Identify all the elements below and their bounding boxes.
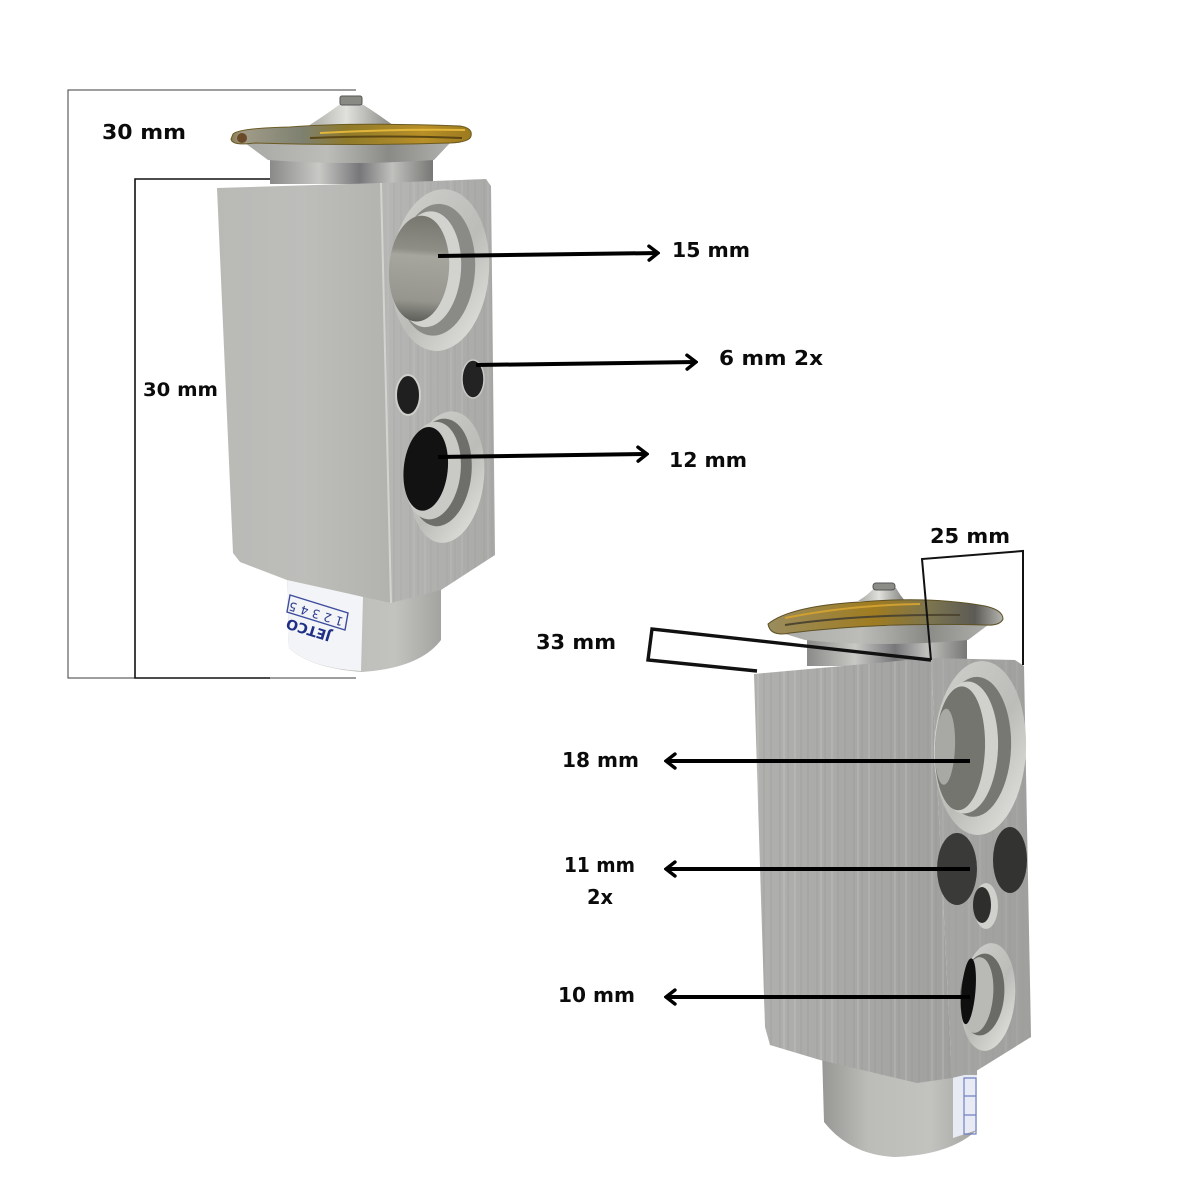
valve 1 lower port <box>396 407 491 547</box>
valve 1 lower cylinder: 1 2 3 4 5 <box>287 599 345 629</box>
valve 2 left medium hole <box>937 833 977 905</box>
valve 1 gold rim <box>231 124 471 144</box>
arrow: 18 mm <box>666 759 970 763</box>
valve 2 large port <box>931 659 1029 837</box>
arrow: 12 mm <box>438 454 647 457</box>
valve 1 screw <box>340 96 362 105</box>
label: 6 mm 2x: 6 mm 2x <box>719 346 823 370</box>
label: 11 mm 2x: 11 mm <box>564 853 635 877</box>
valve 1 bowl <box>245 143 450 163</box>
valve 1 neck <box>270 158 433 184</box>
valve photo: top left <box>217 96 495 672</box>
label: 15 mm: 15 mm <box>672 238 750 262</box>
label: 10 mm: 10 mm <box>558 983 635 1007</box>
label: 18 mm: 18 mm <box>562 748 639 772</box>
dimension bracket: 33 mm <box>648 629 931 671</box>
dimension bracket: body height <box>135 179 270 678</box>
valve 1 small hole right <box>462 360 484 398</box>
valve 2 lower port <box>955 941 1020 1053</box>
valve 2 small threaded hole <box>973 883 998 929</box>
valve 1 body left face <box>217 183 391 603</box>
valve 1 lower cylinder: JETCO <box>284 615 334 644</box>
label: 11 mm 2x: 2x <box>587 885 613 909</box>
valve 1 small hole left <box>396 375 420 415</box>
arrow: 15 mm <box>438 253 658 256</box>
arrow: 6 mm <box>476 362 696 365</box>
valve 2 gold rim <box>768 600 1003 634</box>
valve photo: bottom right <box>754 583 1031 1157</box>
label: 12 mm: 12 mm <box>669 448 747 472</box>
dimension bracket: 25 mm <box>922 551 1023 665</box>
arrow: 10 mm <box>666 995 970 999</box>
label: 33 mm: 33 mm <box>536 630 616 654</box>
label: 30 mm overall: 30 mm <box>102 120 186 144</box>
valve 2 neck <box>807 636 967 666</box>
arrow: 11 mm <box>666 867 970 871</box>
valve 2 screw <box>873 583 895 590</box>
valve 2 bowl <box>772 622 992 644</box>
valve 2 body left face <box>754 658 952 1083</box>
valve 1 dome <box>305 104 397 128</box>
valve 2 dome <box>858 588 905 601</box>
valve 1 body right face <box>381 179 495 603</box>
label: 11 mm 2x <box>564 853 635 909</box>
dimension bracket: overall height <box>68 90 356 678</box>
valve 2 lower cylinder <box>822 1050 977 1157</box>
valve 2 right medium hole <box>993 827 1027 893</box>
label: 25 mm: 25 mm <box>930 524 1010 548</box>
label: 30 mm body: 30 mm <box>143 379 218 401</box>
valve 1 lower cylinder <box>284 575 441 672</box>
valve 2 body right face <box>931 658 1031 1078</box>
valve 1 large port <box>383 186 495 354</box>
